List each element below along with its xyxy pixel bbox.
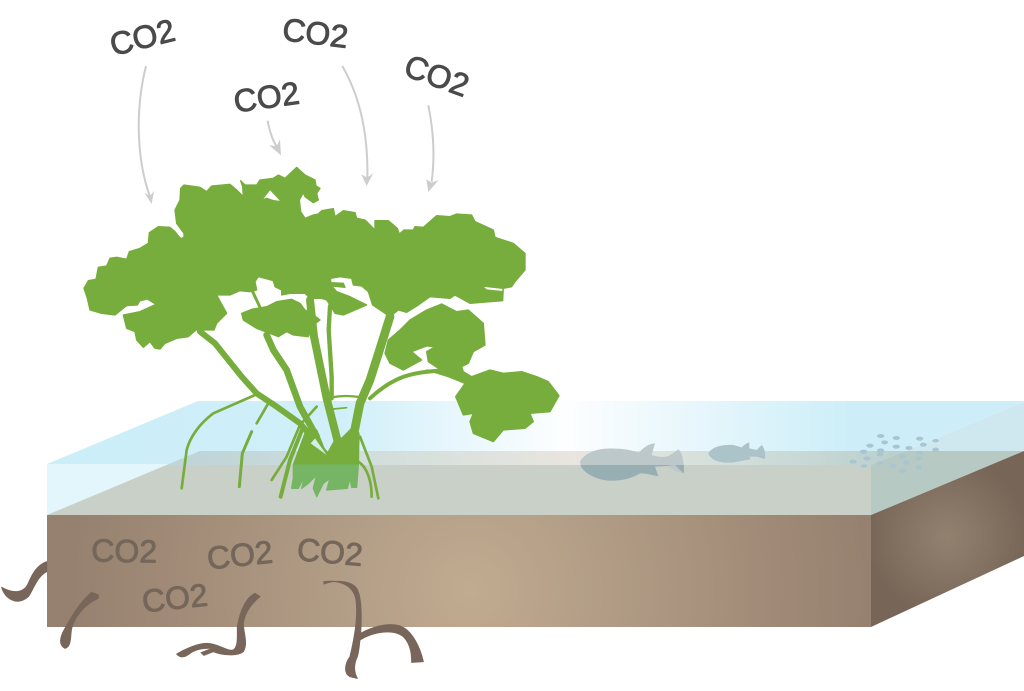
label: CO2 in soil 4: CO2 — [140, 577, 209, 619]
tree: mangrove — [84, 167, 559, 498]
label: CO2 above tree, left: CO2 — [106, 12, 179, 63]
right leaf cluster — [385, 304, 485, 377]
arrow: centre — [268, 121, 281, 155]
root 3 — [177, 593, 260, 657]
panel: sediment surface — [47, 451, 1024, 515]
panel: soil front face — [47, 515, 871, 627]
icon: school of small fish — [849, 434, 939, 473]
label: CO2 in soil 1: CO2 — [91, 532, 157, 570]
label: CO2 above tree, centre: CO2 — [231, 75, 302, 120]
root 4 — [324, 581, 423, 678]
centre leaf cluster — [242, 299, 320, 337]
submerged roots — [292, 465, 358, 497]
arrow: top — [342, 66, 373, 186]
roots: underground — [2, 562, 423, 678]
tree canopy — [84, 167, 525, 349]
tree base — [293, 427, 359, 465]
root 2 — [61, 592, 98, 648]
trunks and branches — [182, 292, 443, 498]
label: CO2 in soil 2: CO2 — [205, 534, 274, 576]
arrow: right — [426, 105, 439, 192]
panel: water front face — [47, 464, 871, 515]
root 1 — [2, 562, 47, 601]
arrows: CO2 absorbed by tree — [139, 66, 439, 204]
panel: water surface — [47, 401, 1024, 465]
icon: large fish — [580, 443, 684, 481]
panel: water right face — [871, 402, 1024, 465]
arrow: left — [139, 66, 154, 204]
label: CO2 above tree, right: CO2 — [400, 47, 474, 104]
label: CO2 above tree, top: CO2 — [280, 11, 350, 55]
label: CO2 in soil 3: CO2 — [296, 531, 364, 573]
lower right leaf cluster — [448, 370, 559, 442]
icon: small fish — [708, 442, 765, 463]
panel: soil right face — [871, 451, 1024, 627]
